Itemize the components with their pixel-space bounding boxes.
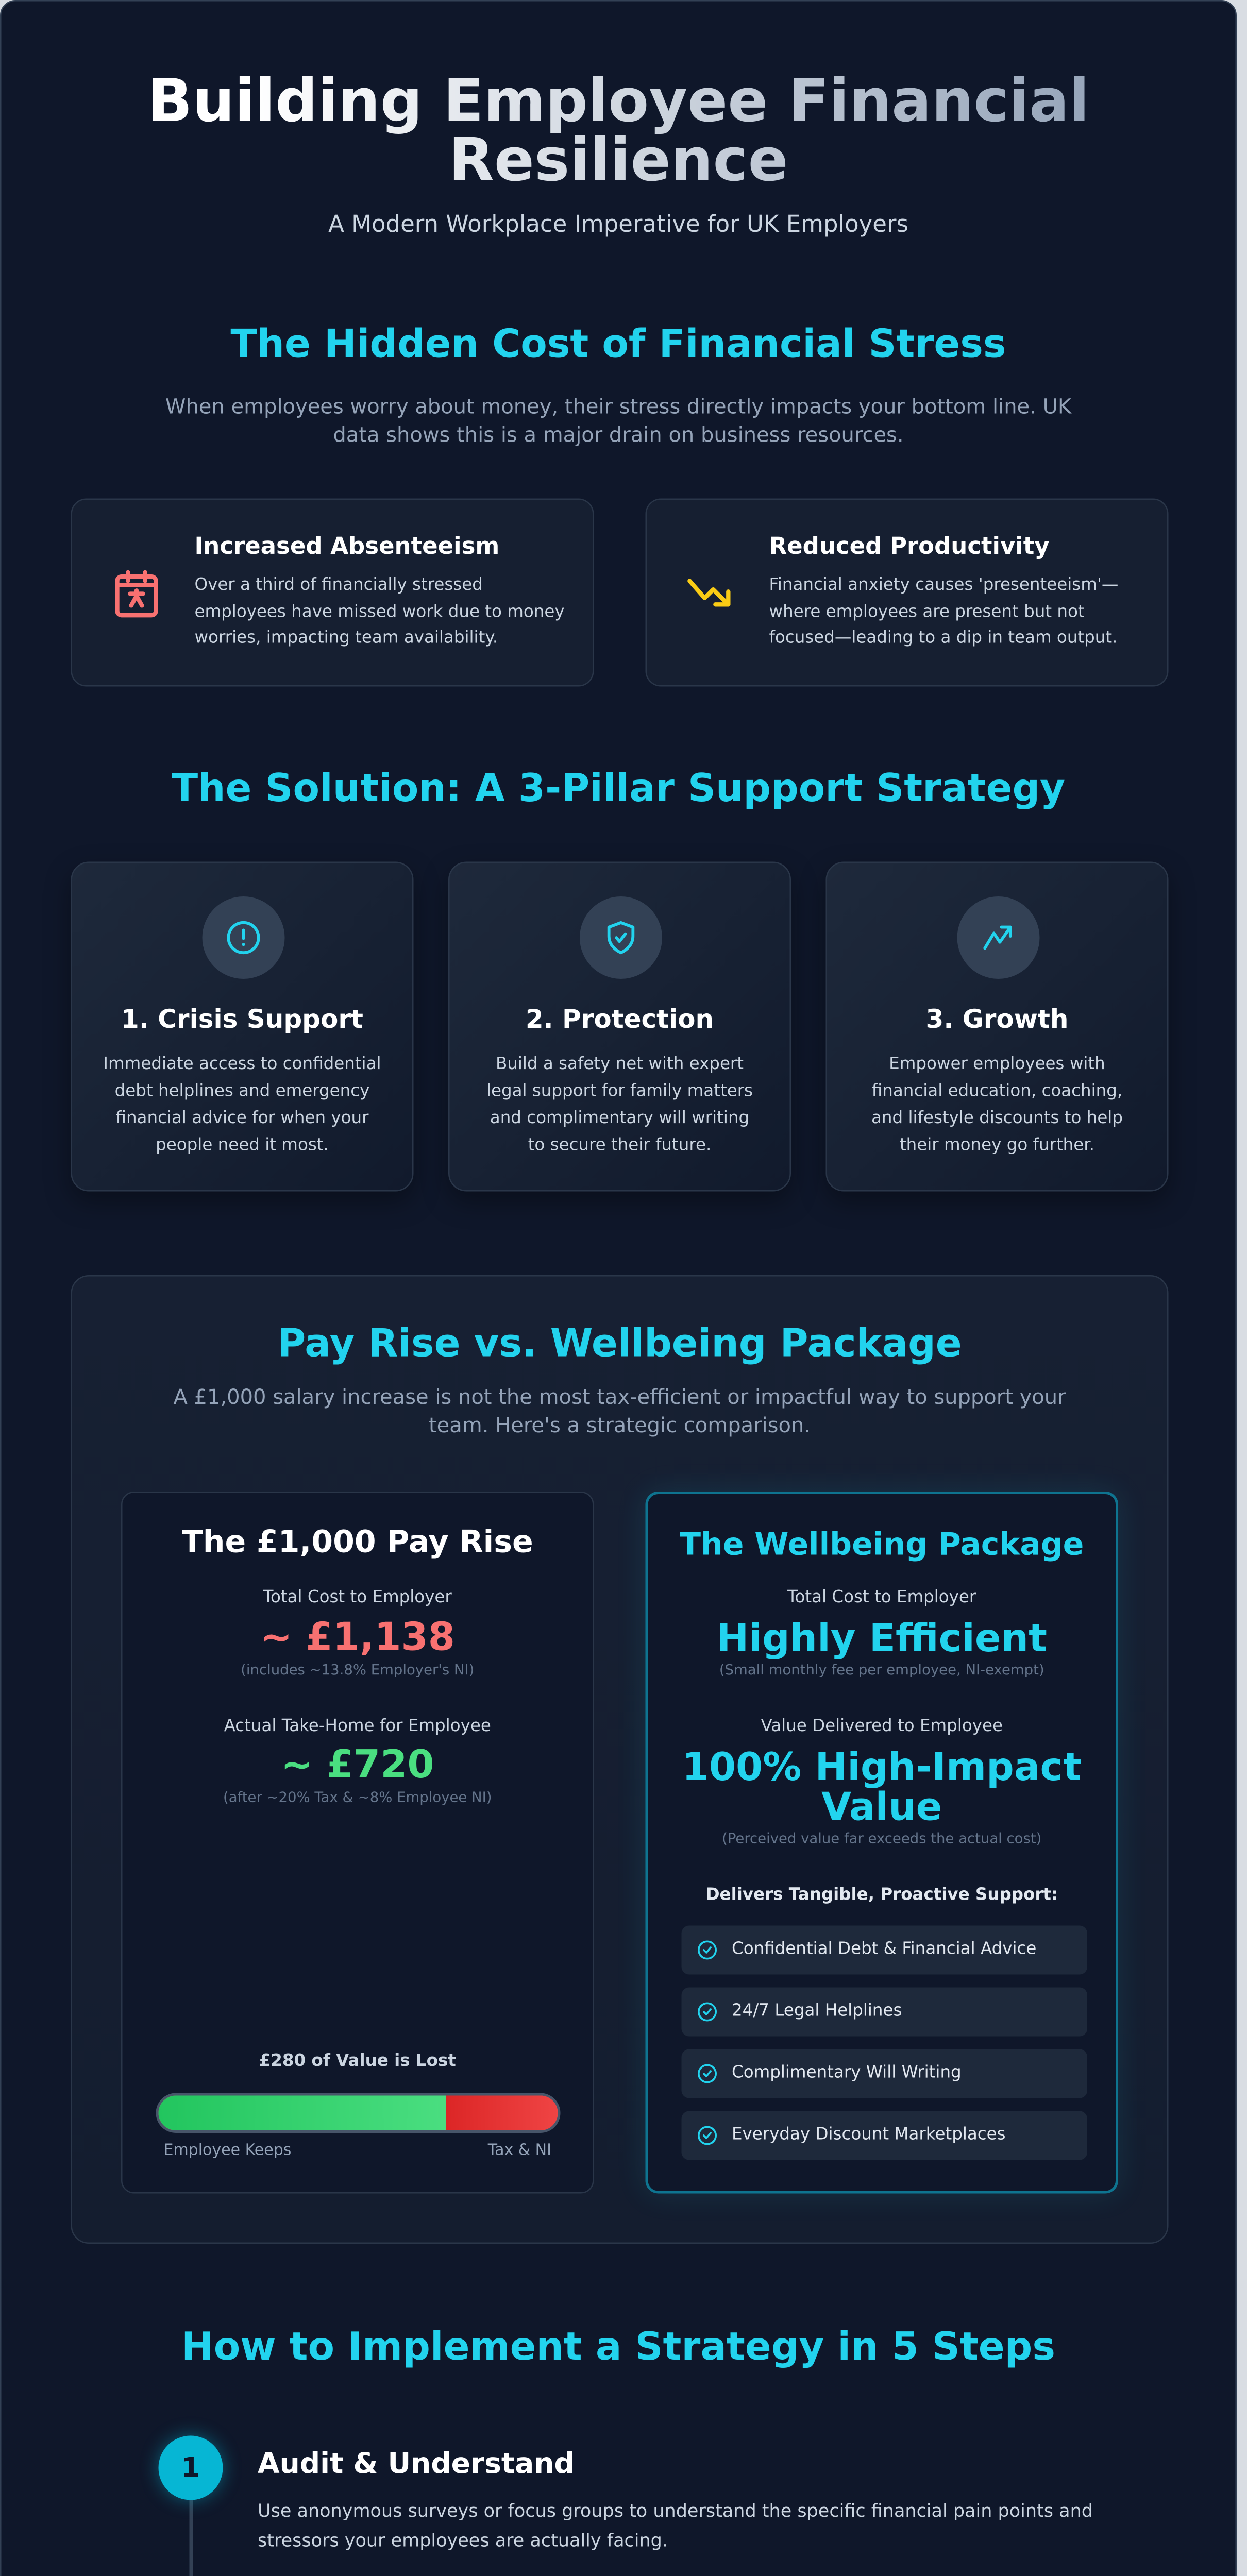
label: cost: Total Cost to Employer: [787, 1588, 976, 1607]
panel: pillar crisis support: [71, 861, 413, 1191]
stat: value: Value: [821, 1785, 942, 1830]
icon: trending up: [957, 896, 1040, 979]
subtitle: A Modern Workplace Imperative for UK Employers: [328, 211, 908, 238]
title: [1, 71, 1236, 190]
heading: absenteeism: Increased Absenteeism: [195, 533, 499, 561]
note: cost: (includes ~13.8% Employer's NI): [241, 1662, 474, 1679]
heading: growth: 3. Growth: [926, 1004, 1068, 1035]
text: absenteeism: Over a third of financially stressed employees have missed work due to money worries, impacting team availability.: [195, 576, 565, 648]
text: protection: Build a safety net with expert legal support for family matters and complimentary will writing to secure their future.: [486, 1055, 753, 1155]
stat: cost: ~ £1,138: [260, 1615, 455, 1660]
list item: debt advice: [681, 1926, 1087, 1974]
list item: debt advice: Confidential Debt & Financial Advice: [732, 1940, 1036, 1959]
text: growth: Empower employees with financial education, coaching, and lifestyle discounts to help their money go further.: [871, 1055, 1123, 1155]
legend: employee keeps: Employee Keeps: [164, 2141, 291, 2159]
heading: pay rise: The £1,000 Pay Rise: [182, 1524, 533, 1560]
heading: wellbeing: The Wellbeing Package: [680, 1526, 1084, 1562]
label: delivers: Delivers Tangible, Proactive Support:: [706, 1886, 1058, 1905]
title: Resilience: [448, 125, 788, 195]
text: crisis support: Immediate access to confidential debt helplines and emergency financial advice for when your people need it most.: [103, 1055, 381, 1155]
legend: tax: Tax & NI: [488, 2141, 551, 2159]
heading: protection: 2. Protection: [526, 1004, 714, 1035]
label: value lost: £280 of Value is Lost: [259, 2052, 456, 2071]
list item: discounts: [681, 2111, 1087, 2160]
title: Building Employee Financial: [147, 66, 1089, 135]
list item: will writing: Complimentary Will Writing: [732, 2063, 962, 2082]
note: take-home: (after ~20% Tax & ~8% Employee NI): [223, 1789, 492, 1806]
panel: reduced productivity: [645, 499, 1169, 686]
icon: calendar: [115, 570, 158, 617]
intro text: hidden cost: When employees worry about money, their stress directly impacts your bottom line. UK data shows this is a major drain on business resources.: [165, 394, 1071, 446]
note: fee: (Small monthly fee per employee, NI-exempt): [719, 1662, 1044, 1679]
heading: steps: How to Implement a Strategy in 5 Steps: [181, 2325, 1055, 2370]
stat: value: 100% High-Impact: [682, 1745, 1082, 1790]
step 1: 1: [181, 2452, 200, 2483]
stat: efficient: Highly Efficient: [717, 1617, 1047, 1662]
label: value: Value Delivered to Employee: [761, 1717, 1003, 1736]
heading: hidden cost: The Hidden Cost of Financial Stress: [230, 322, 1006, 367]
icon: trending down: [687, 579, 731, 607]
label: take-home: Actual Take-Home for Employee: [224, 1717, 491, 1736]
text: productivity: Financial anxiety causes 'presenteeism'—where employees are present but not focused—leading to a dip in team output.: [769, 576, 1118, 648]
note: perceived: (Perceived value far exceeds the actual cost): [722, 1830, 1041, 1847]
stat: take-home: ~ £720: [281, 1742, 434, 1788]
heading: comparison: Pay Rise vs. Wellbeing Package: [277, 1321, 962, 1366]
heading: solution: The Solution: A 3-Pillar Support Strategy: [172, 767, 1065, 811]
list item: legal: [681, 1988, 1087, 2036]
panel: wellbeing package: [645, 1492, 1118, 2194]
panel: pillar protection: [448, 861, 791, 1191]
text: comparison intro: A £1,000 salary increase is not the most tax-efficient or impactful way to support your team. Here's a strategic comparison.: [173, 1385, 1066, 1437]
stat: value: [682, 1745, 1082, 1830]
list item: legal: 24/7 Legal Helplines: [732, 2002, 902, 2021]
heading: productivity: Reduced Productivity: [769, 533, 1050, 561]
timeline: 5 steps: [149, 2427, 1093, 2576]
step 1: Audit & Understand: [258, 2448, 575, 2481]
list item: will writing: [681, 2049, 1087, 2098]
panel: increased absenteeism: [71, 499, 594, 686]
label: cost: Total Cost to Employer: [263, 1588, 452, 1607]
icon: alert circle: [202, 896, 284, 979]
step 1: [149, 2427, 1093, 2551]
icon: shield check: [580, 896, 662, 979]
panel: pillar growth: [825, 861, 1169, 1191]
step 1: Use anonymous surveys or focus groups to understand the specific financial pain points and stressors your employees are actually facing.: [258, 2501, 1093, 2551]
panel: pay rise vs wellbeing: [71, 1275, 1169, 2244]
heading: crisis support: 1. Crisis Support: [121, 1004, 363, 1035]
panel: pay rise: [121, 1492, 594, 2194]
list item: discounts: Everyday Discount Marketplaces: [732, 2125, 1006, 2144]
bar chart: keeps vs tax: [156, 2093, 561, 2133]
